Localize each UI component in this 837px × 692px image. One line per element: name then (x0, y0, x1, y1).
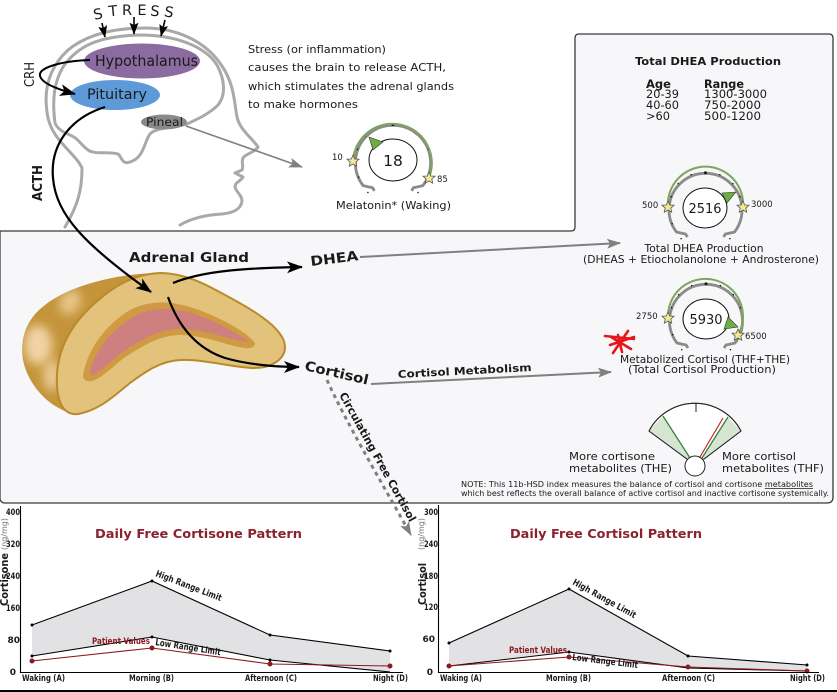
gauge: metabolized cortisol: Metabolized Cortisol (THF+THE) (620, 354, 790, 366)
text: stress explanation: causes the brain to release ACTH, (248, 61, 446, 74)
gauge: total DHEA: (DHEAS + Etiocholanolone + Androsterone) (583, 254, 819, 266)
table: total DHEA production: 40-60 (646, 98, 679, 112)
chart: daily free cortisol pattern: Patient Values (509, 646, 567, 656)
label: ACTH: ACTH (31, 165, 46, 201)
chart: daily free cortisone pattern: 400 (6, 508, 20, 518)
chart: daily free cortisone pattern: High Range Limit (154, 569, 223, 604)
label: more cortisol metabolites: metabolites (THF) (722, 462, 824, 475)
text: stress explanation: to make hormones (248, 98, 358, 111)
gauge: metabolized cortisol (620, 279, 790, 376)
heading: stress: R (122, 3, 132, 19)
gauge: cortisol metabolite balance (649, 403, 741, 476)
brain region: pineal (141, 114, 187, 130)
arrow: ACTH (53, 107, 151, 292)
gauge: metabolized cortisol: 6500 (745, 332, 767, 342)
table: total DHEA production: 20-39 (646, 87, 679, 101)
chart: daily free cortisol pattern: Night (D) (790, 674, 825, 684)
chart: daily free cortisol pattern: Cortisol (417, 563, 429, 605)
label: more cortisol metabolites: More cortisol (722, 450, 796, 463)
brain region: pineal: Pineal (146, 115, 183, 129)
chart: daily free cortisol pattern: Low Range Limit (572, 653, 639, 671)
table: total DHEA production: 1300-3000 (704, 87, 767, 101)
chart: daily free cortisone pattern: 320 (6, 540, 20, 550)
heading: stress: S (149, 4, 160, 20)
chart: daily free cortisol pattern: 0 (427, 668, 433, 678)
chart: daily free cortisol pattern: 180 (424, 572, 438, 582)
chart: daily free cortisone pattern: Waking (A) (22, 674, 65, 684)
heading: stress: S (163, 4, 175, 22)
chart: daily free cortisol pattern: 120 (424, 603, 438, 613)
heading: stress: E (137, 3, 147, 19)
gauge: total DHEA: Total DHEA Production (643, 243, 764, 255)
gauge: melatonin: Melatonin* (Waking) (336, 200, 451, 212)
arrows: stress (102, 17, 165, 37)
arrow: DHEA to total production (360, 243, 620, 257)
gauge: total DHEA: 2516 (688, 201, 722, 217)
heading: adrenal gland: Adrenal Gland (129, 250, 249, 266)
table: total DHEA production: 750-2000 (704, 98, 761, 112)
table: total DHEA production: Range (704, 77, 744, 91)
chart: daily free cortisone pattern: Afternoon (C) (245, 674, 297, 684)
label: CRH: CRH (22, 62, 38, 87)
label: more cortisol metabolites (722, 450, 824, 475)
chart: daily free cortisol pattern: High Range Limit (571, 578, 638, 621)
label: more cortisone metabolites: metabolites (THE) (569, 462, 672, 475)
label: cortisol metabolism: Cortisol Metabolism (398, 362, 532, 381)
text: stress explanation (248, 43, 454, 111)
chart: daily free cortisone pattern: 240 (6, 572, 20, 582)
chart: daily free cortisol pattern: Waking (A) (440, 674, 482, 684)
text: stress explanation: Stress (or inflammation) (248, 43, 386, 56)
label: circulating free cortisol: Circulating Free Cortisol (336, 390, 419, 524)
text: note (461, 480, 829, 498)
gauge: metabolized cortisol: 2750 (636, 312, 658, 322)
gauge: melatonin: 10 (332, 153, 343, 163)
chart: daily free cortisone pattern: (ng/mg) (0, 518, 9, 550)
chart: daily free cortisol pattern: Daily Free Cortisol Pattern (510, 526, 702, 541)
label: cortisol: Cortisol (303, 358, 370, 389)
gauge: total DHEA: 500 (642, 201, 658, 211)
label: more cortisone metabolites (569, 450, 672, 475)
arrow: cortisol metabolism (371, 372, 611, 384)
chart: daily free cortisone pattern: Morning (B) (129, 674, 174, 684)
chart: daily free cortisone pattern: Night (D) (373, 674, 408, 684)
chart: daily free cortisol pattern: 60 (422, 635, 435, 645)
chart: daily free cortisol pattern (417, 505, 825, 684)
table: total DHEA production (635, 55, 781, 123)
gauge: melatonin: 85 (437, 175, 448, 185)
chart: daily free cortisone pattern: Patient Values (92, 637, 150, 647)
heading: stress: T (107, 4, 118, 21)
chart: daily free cortisol pattern: Morning (B) (546, 674, 591, 684)
icon: red asterisk (605, 331, 634, 353)
gauge: metabolized cortisol: (Total Cortisol Production) (628, 364, 776, 376)
arrow: CRH (40, 60, 90, 94)
chart: daily free cortisone pattern: Daily Free Cortisone Pattern (95, 526, 302, 541)
brain region: hypothalamus (84, 44, 200, 78)
gauge: melatonin: 18 (383, 152, 403, 170)
chart: daily free cortisol pattern: 300 (424, 508, 438, 518)
icon: adrenal gland (22, 273, 285, 414)
gauge: total DHEA: 3000 (751, 200, 773, 210)
arrow: to cortisol (168, 297, 299, 367)
gauge: melatonin (332, 123, 451, 212)
heading: stress (92, 3, 175, 24)
chart: daily free cortisol pattern: 240 (424, 540, 438, 550)
label: DHEA: DHEA (310, 248, 360, 270)
table: total DHEA production: >60 (646, 109, 670, 123)
chart: daily free cortisol pattern: Afternoon (C) (662, 674, 715, 684)
chart: daily free cortisone pattern: 160 (6, 604, 20, 614)
chart: daily free cortisone pattern: Low Range Limit (155, 638, 222, 658)
chart: daily free cortisone pattern: 80 (7, 636, 20, 646)
chart: daily free cortisol pattern: (ng/mg) (417, 518, 426, 550)
text: stress explanation: which stimulates the adrenal glands (248, 80, 454, 93)
table: total DHEA production: 500-1200 (704, 109, 761, 123)
brain region: pituitary (70, 80, 160, 110)
table: total DHEA production: Total DHEA Production (635, 55, 781, 68)
text: note: which best reflects the overall balance of active cortisol and inactive cortisone systemically. (461, 489, 829, 498)
chart: daily free cortisone pattern: 0 (10, 668, 16, 678)
arrow: to DHEA (173, 267, 302, 283)
table: total DHEA production: Age (646, 77, 671, 91)
icon: head outline (46, 28, 258, 227)
arrow: circulating free cortisol (327, 380, 411, 535)
label: more cortisone metabolites: More cortisone (569, 450, 655, 463)
panel: adrenal and DHEA background (0, 34, 833, 503)
brain region: hypothalamus: Hypothalamus (95, 52, 198, 70)
chart: daily free cortisone pattern (0, 506, 408, 684)
gauge: total DHEA (583, 167, 819, 266)
text: note: NOTE: This 11b-HSD index measures the balance of cortisol and cortisone metabolites (461, 480, 813, 489)
gauge: metabolized cortisol: 5930 (690, 312, 722, 328)
brain region: pituitary: Pituitary (87, 87, 147, 103)
arrow: pineal to melatonin (186, 126, 302, 167)
heading: stress: S (92, 6, 104, 24)
